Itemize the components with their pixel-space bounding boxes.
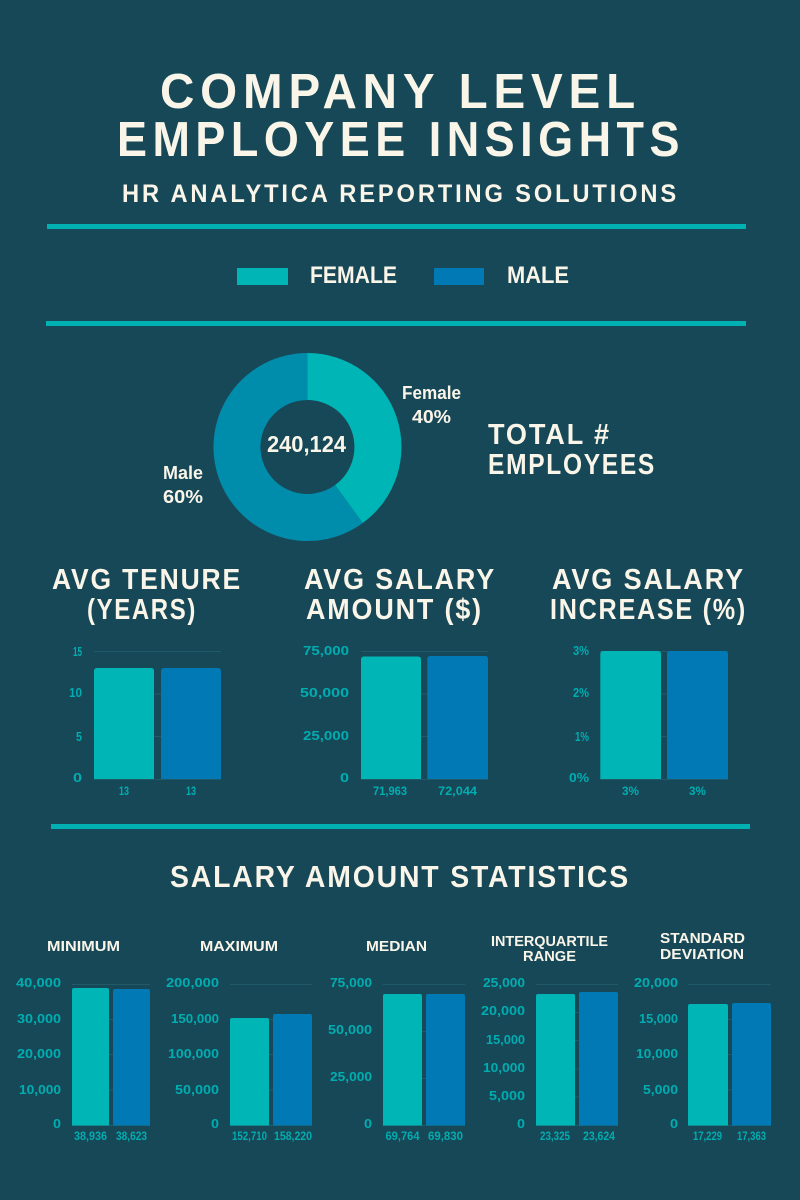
subtitle: HR ANALYTICA REPORTING SOLUTIONS	[122, 180, 679, 208]
bar chart: maximum: 152,710	[232, 1129, 267, 1143]
heading: average tenure: AVG TENURE	[52, 564, 242, 596]
heading: total employees: EMPLOYEES	[488, 449, 656, 481]
chart title: interquartile range: INTERQUARTILE	[491, 934, 608, 950]
bar chart: average tenure: 10	[69, 685, 82, 700]
bar chart: maximum	[166, 939, 312, 1143]
bar chart: average salary increase: 3%	[622, 784, 639, 798]
bar chart: average tenure: 5	[76, 729, 82, 744]
bar chart: interquartile range: 23,624	[583, 1129, 615, 1143]
bar chart: median: 50,000	[328, 1022, 372, 1037]
bar chart: standard deviation: 17,229	[693, 1129, 722, 1143]
bar chart: median: 69,764	[386, 1129, 420, 1143]
bar chart: standard deviation: 0	[670, 1116, 678, 1131]
chart title: minimum: MINIMUM	[47, 939, 120, 955]
heading: average tenure	[52, 564, 242, 626]
bar chart: maximum: 50,000	[175, 1082, 219, 1097]
bar: female 17,229	[688, 1004, 728, 1126]
bar chart: average salary increase: 0%	[569, 770, 589, 785]
title: EMPLOYEE INSIGHTS	[117, 113, 685, 167]
bar chart: average salary amount: 75,000	[303, 643, 349, 658]
bar chart: average tenure: 13	[119, 784, 129, 798]
bar: female 152,710	[230, 1018, 269, 1126]
bar chart: interquartile range: 0	[517, 1116, 525, 1131]
bar chart: minimum: 20,000	[17, 1046, 61, 1061]
bar chart: maximum: 150,000	[171, 1011, 219, 1026]
bar chart: maximum: 0	[211, 1116, 219, 1131]
legend: female: FEMALE	[310, 262, 397, 289]
bar: male 69,830	[426, 994, 465, 1126]
bar chart: median	[328, 939, 465, 1143]
bar chart: average salary amount: 50,000	[300, 685, 349, 700]
bar chart: minimum: 38,623	[116, 1129, 147, 1143]
bar chart: median: 0	[364, 1116, 372, 1131]
bar chart: interquartile range: 10,000	[483, 1060, 525, 1075]
bar: female 3%	[600, 651, 661, 779]
bar chart: interquartile range: 25,000	[483, 975, 525, 990]
bar chart: standard deviation: 20,000	[634, 975, 678, 990]
legend: female	[237, 262, 397, 289]
bar chart: maximum: 100,000	[168, 1046, 219, 1061]
heading: total employees	[488, 419, 656, 481]
bar chart: standard deviation: 15,000	[639, 1011, 678, 1026]
donut label: male: 60%	[163, 487, 203, 507]
bar chart: average salary increase: 3%	[573, 643, 589, 658]
bar chart: average salary increase	[569, 643, 728, 798]
bar: female 38,936	[72, 988, 109, 1126]
bar: male 17,363	[732, 1003, 771, 1126]
donut chart: gender split	[163, 353, 461, 541]
bar chart: standard deviation: 17,363	[737, 1129, 766, 1143]
bar chart: average salary increase: 2%	[573, 685, 589, 700]
donut segment: female 40%	[308, 353, 401, 523]
bar: male 38,623	[113, 989, 150, 1126]
bar chart: minimum	[16, 939, 150, 1143]
bar chart: interquartile range: 23,325	[540, 1129, 570, 1143]
bar chart: average tenure	[69, 644, 221, 798]
heading: average salary increase	[550, 564, 747, 626]
bar chart: median: 25,000	[330, 1069, 372, 1084]
legend	[237, 262, 569, 289]
chart title: standard deviation	[660, 931, 745, 963]
bar chart: interquartile range: 20,000	[481, 1003, 525, 1018]
legend: male: MALE	[507, 262, 569, 289]
bar chart: standard deviation: 10,000	[636, 1046, 678, 1061]
bar chart: average salary amount: 25,000	[303, 728, 349, 743]
heading: average salary amount: AVG SALARY	[304, 564, 496, 596]
bar: male 13	[161, 668, 221, 779]
bar chart: interquartile range: 15,000	[486, 1032, 525, 1047]
chart title: maximum: MAXIMUM	[200, 939, 278, 955]
bar chart: minimum: 10,000	[19, 1082, 61, 1097]
bar chart: average salary amount: 0	[340, 770, 349, 785]
donut segment: male 60%	[213, 353, 363, 541]
heading: average salary increase: INCREASE (%)	[550, 594, 747, 626]
bar chart: interquartile range: 5,000	[489, 1088, 525, 1103]
heading: average tenure: (YEARS)	[87, 594, 197, 626]
heading: average salary amount	[304, 564, 496, 626]
donut centre total: 240,124	[267, 431, 346, 457]
bar: male 72,044	[427, 656, 488, 779]
chart title: standard deviation: STANDARD	[660, 931, 745, 947]
bar chart: average tenure: 13	[186, 784, 196, 798]
bar: female 71,963	[361, 656, 421, 779]
chart title: interquartile range: RANGE	[523, 949, 576, 965]
bar: female 23,325	[536, 994, 575, 1126]
bar chart: average salary amount: 71,963	[373, 784, 407, 798]
bar: female 13	[94, 668, 154, 779]
bar chart: average salary amount	[300, 643, 488, 798]
bar: female 69,764	[383, 994, 422, 1126]
bar chart: average salary increase: 1%	[575, 729, 589, 744]
heading: average salary amount: AMOUNT ($)	[306, 594, 483, 626]
donut label: male	[163, 463, 203, 507]
bar chart: median: 69,830	[428, 1129, 463, 1143]
heading: average salary increase: AVG SALARY	[552, 564, 745, 596]
heading: salary amount statistics: SALARY AMOUNT STATISTICS	[170, 859, 630, 894]
bar chart: interquartile range	[481, 934, 618, 1143]
bar chart: minimum: 40,000	[16, 975, 61, 990]
bar chart: maximum: 158,220	[274, 1129, 312, 1143]
donut label: female	[402, 383, 461, 427]
bar chart: minimum: 38,936	[74, 1129, 107, 1143]
bar chart: maximum: 200,000	[166, 975, 219, 990]
bar chart: average salary increase: 3%	[689, 784, 706, 798]
heading: total employees: TOTAL #	[488, 419, 611, 451]
chart title: interquartile range	[491, 934, 608, 965]
donut label: female: Female	[402, 383, 461, 403]
bar chart: minimum: 0	[53, 1116, 61, 1131]
bar chart: average salary amount: 72,044	[438, 784, 477, 798]
title: COMPANY LEVEL	[160, 65, 641, 119]
donut label: male: Male	[163, 463, 203, 483]
title	[117, 65, 685, 167]
bar chart: standard deviation	[634, 931, 771, 1143]
bar chart: minimum: 30,000	[17, 1011, 61, 1026]
chart title: median: MEDIAN	[366, 939, 427, 955]
chart title: standard deviation: DEVIATION	[660, 947, 744, 963]
donut label: female: 40%	[412, 407, 451, 427]
bar: male 158,220	[273, 1014, 312, 1126]
bar chart: standard deviation: 5,000	[643, 1082, 678, 1097]
bar: male 23,624	[579, 992, 618, 1126]
bar chart: median: 75,000	[330, 975, 372, 990]
legend: male	[434, 262, 569, 289]
bar chart: average tenure: 0	[73, 770, 82, 785]
bar: male 3%	[667, 651, 728, 779]
bar chart: average tenure: 15	[73, 644, 82, 659]
